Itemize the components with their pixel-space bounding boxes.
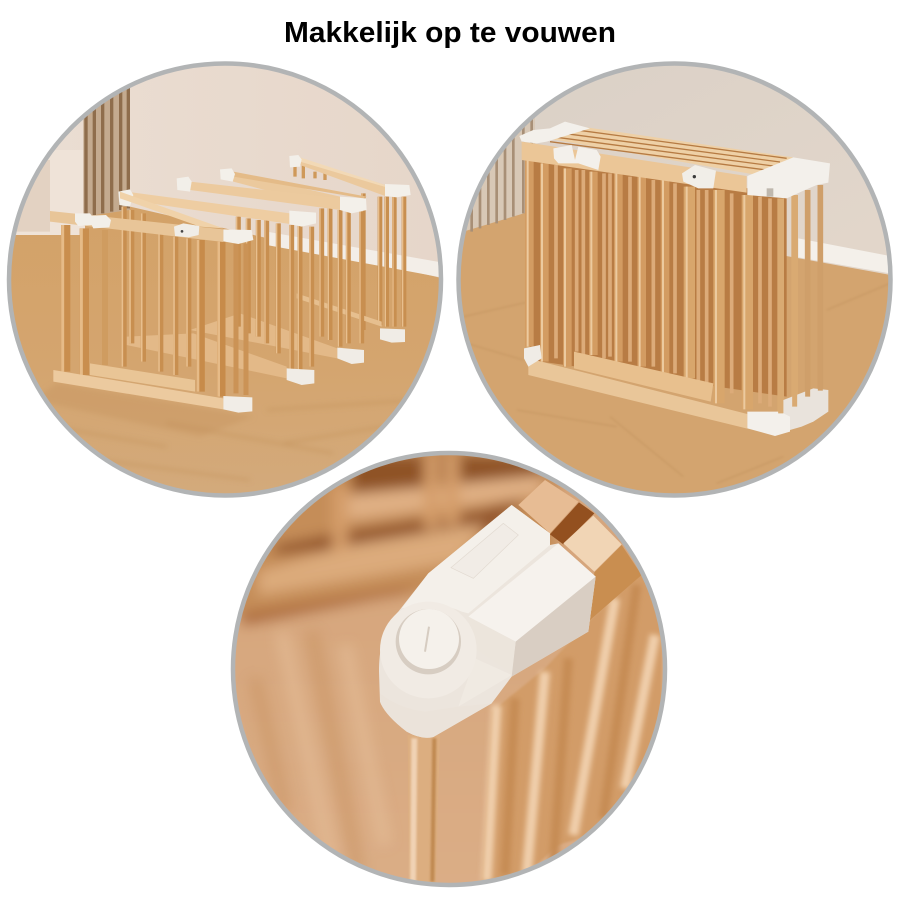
hinge top arm (402, 505, 550, 613)
white hinge clip (379, 505, 596, 738)
title: Makkelijk op te vouwen (284, 17, 616, 49)
knob housing (380, 613, 472, 654)
block faces (468, 543, 596, 642)
folded fence block (519, 122, 830, 436)
interior (530, 160, 787, 397)
hinge base (379, 505, 596, 738)
main bars (529, 160, 665, 373)
thin rear bars (556, 165, 770, 407)
baseboard (267, 232, 447, 278)
panel: fully folded fence photo (450, 50, 900, 500)
top rail (522, 142, 747, 193)
circle border left (9, 64, 441, 496)
white feet (524, 345, 542, 367)
foreground round bar (409, 737, 438, 882)
baseboard (798, 238, 893, 274)
wall (55, 66, 439, 278)
floor grain (463, 283, 890, 483)
floor (0, 207, 450, 500)
circle border right (458, 64, 890, 496)
blurred background (235, 455, 663, 883)
rail (518, 480, 642, 620)
floor shading and grain (58, 400, 297, 446)
circle border bottom (233, 453, 665, 885)
fence panel 3 (177, 168, 367, 364)
curtain (16, 88, 130, 235)
floor (450, 210, 900, 500)
panel: folding the fence panels photo (0, 50, 450, 500)
floor streaks (255, 632, 385, 872)
bottom rail (528, 358, 747, 429)
curtain (463, 117, 535, 232)
fence panel 1 (front) (50, 192, 253, 413)
white top corners (519, 122, 590, 143)
panel: hinge close-up photo (235, 455, 663, 883)
wall (535, 66, 888, 274)
blurred wooden bars (482, 555, 662, 882)
top slats (554, 128, 793, 174)
fence panel 2 (118, 189, 316, 385)
fence panel 4 (rear) (289, 155, 411, 343)
